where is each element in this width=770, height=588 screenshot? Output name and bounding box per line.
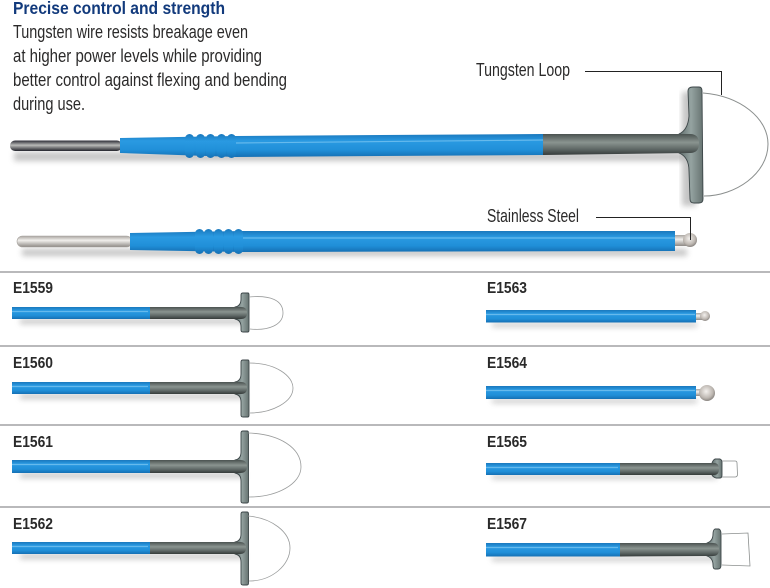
E1562 item: E1562 — [13, 516, 53, 533]
E1567 item: E1567 — [487, 516, 527, 533]
E1565 item: E1565 — [487, 434, 527, 451]
E1559 item: E1559 — [13, 280, 53, 297]
E1563 item — [486, 280, 710, 327]
E1562 item — [12, 512, 290, 585]
E1567 item — [486, 516, 750, 569]
E1561 item — [12, 431, 301, 503]
E1564 item — [486, 355, 715, 403]
E1561 item: E1561 — [13, 434, 53, 451]
E1564 item: E1564 — [487, 355, 527, 372]
callout: Tungsten Loop — [476, 59, 722, 95]
callout: Stainless Steel: Stainless Steel — [487, 205, 579, 226]
large tungsten loop electrode — [10, 87, 768, 206]
E1559 item — [12, 280, 283, 332]
E1565 item — [486, 434, 738, 479]
intro text: at higher power levels while providing — [13, 45, 262, 66]
intro text: Tungsten wire resists breakage even — [13, 21, 248, 42]
E1563 item: E1563 — [487, 280, 527, 297]
intro text — [13, 21, 287, 114]
intro text: better control against flexing and bending — [13, 69, 287, 90]
E1560 item: E1560 — [13, 355, 53, 372]
E1560 item — [12, 355, 293, 417]
large stainless steel electrode — [17, 229, 697, 256]
callout: Tungsten Loop: Tungsten Loop — [476, 59, 570, 80]
intro text: during use. — [13, 93, 85, 114]
callout: Stainless Steel — [487, 205, 690, 240]
